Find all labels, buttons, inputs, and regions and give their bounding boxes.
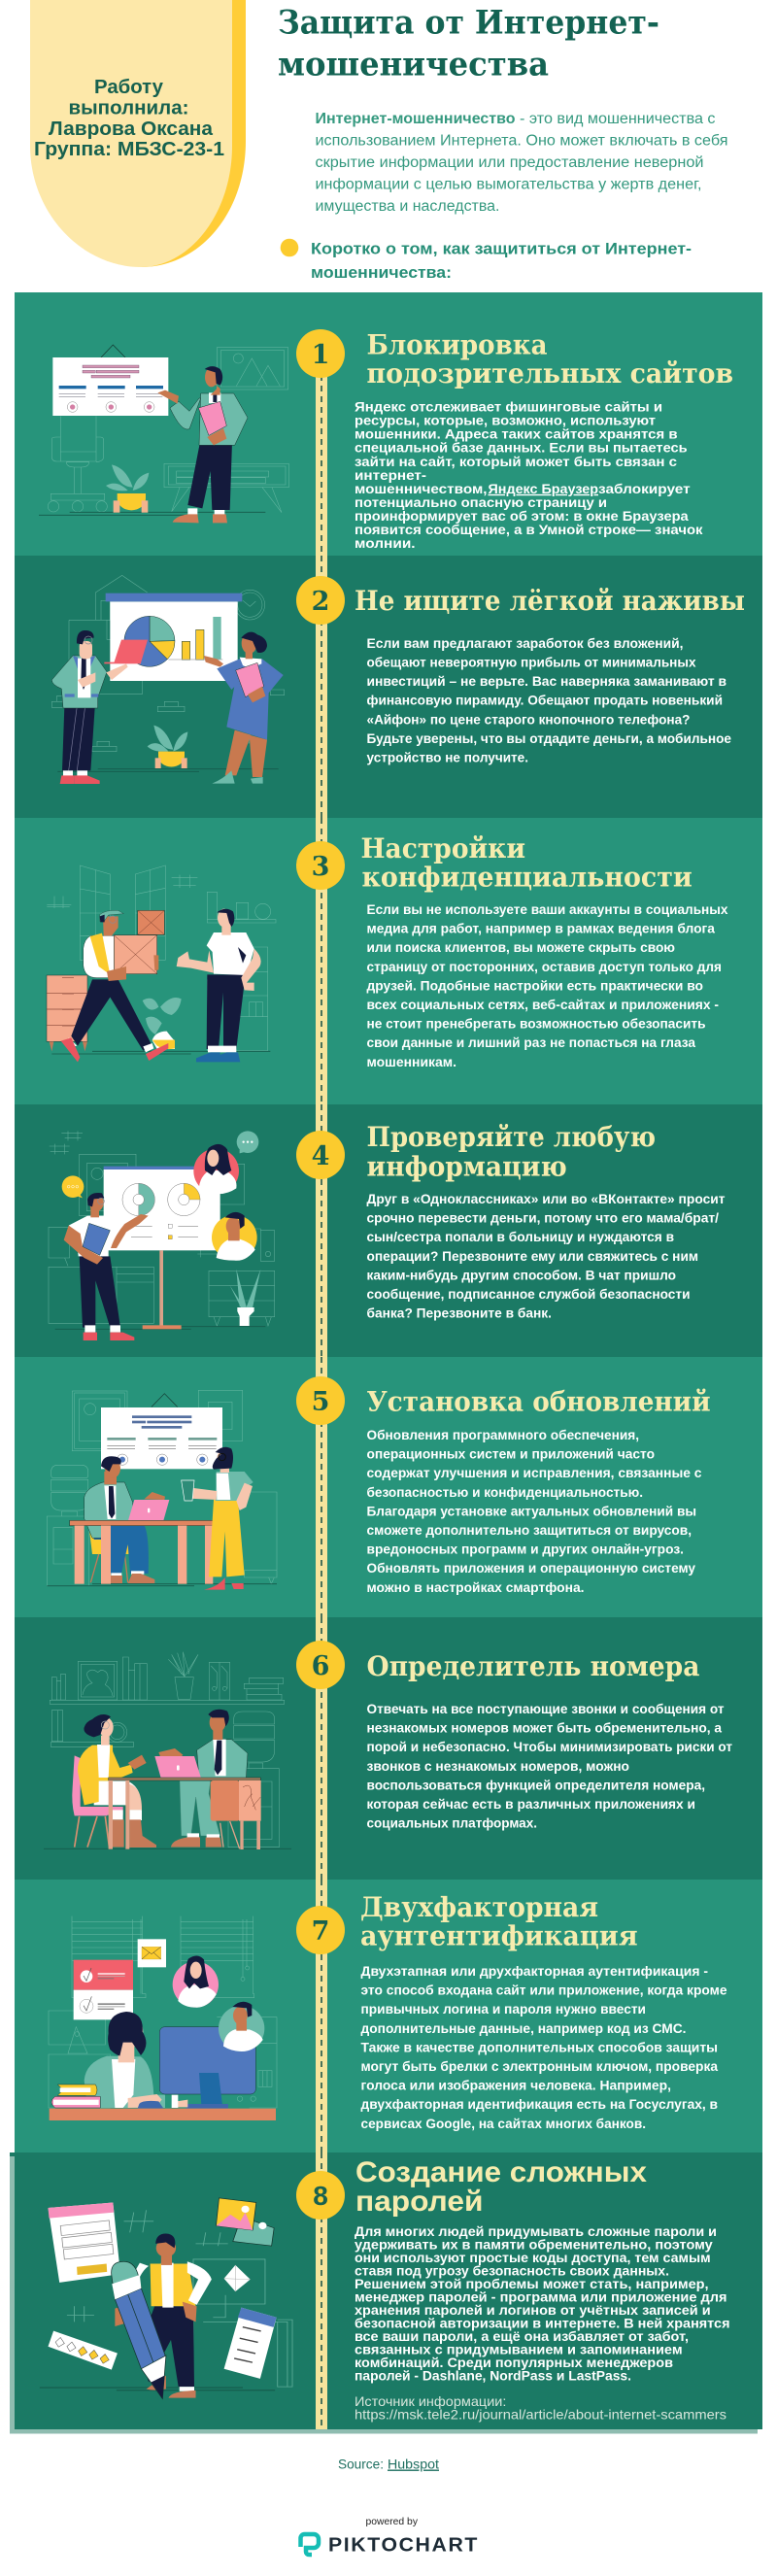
body text 5: Благодаря установке актуальных обновлений вы bbox=[367, 1504, 696, 1519]
body text 3: Если вы не используете ваши аккаунты в социальных bbox=[367, 902, 728, 918]
panel 5: install updates bbox=[15, 1357, 762, 1617]
illustration: man with giant pencil and cards bbox=[40, 2198, 292, 2399]
heading 8: Создание сложных bbox=[355, 2156, 647, 2188]
number badge 8: 8 bbox=[313, 2181, 328, 2211]
body text 3: страницу от посторонних, оставив доступ только для bbox=[367, 960, 722, 975]
body text 7: голоса или изображения человека. Например, bbox=[361, 2079, 671, 2094]
powered by Piktochart logo bbox=[301, 2516, 479, 2557]
intro text: - это вид мошенничества с bbox=[520, 111, 716, 127]
heading 1: подозрительных сайтов bbox=[367, 357, 733, 390]
body text 1: появится сообщение, а в Умной строке— значок bbox=[355, 523, 703, 538]
body text 8: все ваши пароли, а ещё она избавляет от забот, bbox=[355, 2329, 689, 2345]
body text 7: Также в качестве дополнительных способов защиты bbox=[361, 2040, 718, 2055]
body text 5: содержат улучшения и исправления, связанные с bbox=[367, 1466, 702, 1481]
body text 6: воспользоваться функцией определителя номера, bbox=[367, 1778, 705, 1793]
body text 4: Друг в «Одноклассниках» или во «ВКонтакте» просит bbox=[367, 1192, 726, 1207]
body text 1: интернет- bbox=[355, 468, 426, 484]
body text 4: каким-нибудь другим способом. В чат пришло bbox=[367, 1268, 676, 1283]
heading 8: паролей bbox=[355, 2186, 484, 2218]
body text 4 bbox=[367, 1192, 726, 1322]
body text 5: вредоносных программ и других онлайн-угроз. bbox=[367, 1542, 684, 1558]
body text 4: сын/сестра попали в больницу и нуждаются в bbox=[367, 1230, 674, 1245]
body text 1: ресурсы, которые, возможно, используют bbox=[355, 414, 656, 429]
heading 7: аунтентификация bbox=[360, 1920, 638, 1952]
body text 8: ставя под угрозу безопасность своих данных. bbox=[355, 2263, 669, 2279]
body text 5 bbox=[367, 1428, 702, 1596]
body text 7: это способ входана сайт или приложение, когда кроме bbox=[361, 1983, 727, 1999]
heading 6: Определитель номера bbox=[367, 1650, 699, 1682]
number badge 6 bbox=[296, 1641, 345, 1689]
body text 4: операции? Перезвоните ему или свяжитесь с ним bbox=[367, 1249, 698, 1265]
number badge 6: 6 bbox=[312, 1651, 329, 1681]
body text 7: могут быть брелки с электронным ключом, проверка bbox=[361, 2059, 718, 2075]
author badge bbox=[30, 0, 246, 267]
body text 5: операционных систем и приложений часто bbox=[367, 1447, 655, 1463]
body text 3 bbox=[367, 902, 728, 1070]
body text 6: социальных платформах. bbox=[367, 1816, 537, 1832]
number badge 1 bbox=[296, 329, 345, 378]
number badge 1: 1 bbox=[312, 340, 329, 370]
body text 7: дополнительные данные, например код из СМС. bbox=[361, 2021, 686, 2037]
body text 4: срочно перевести деньги, потому что его мама/брат/ bbox=[367, 1211, 719, 1227]
panel 2: no easy money bbox=[15, 556, 762, 818]
source of information: https://msk.tele2.ru/journal/article/about-internet-scammers bbox=[355, 2406, 726, 2422]
body text 2: инвестиций – не верьте. Вас наверняка заманивают в bbox=[367, 674, 726, 690]
body text 8: паролей - Dashlane, NordPass и LastPass. bbox=[355, 2368, 631, 2384]
number badge 7: 7 bbox=[312, 1916, 329, 1947]
number badge 8 bbox=[296, 2171, 345, 2220]
body text 6 bbox=[367, 1702, 732, 1832]
author badge: выполнила: bbox=[68, 97, 188, 119]
number badge 3 bbox=[296, 841, 345, 890]
body text 6: порой и небезопасно. Чтобы минимизировать риски от bbox=[367, 1740, 732, 1755]
heading 7 bbox=[360, 1891, 638, 1952]
source credit: Hubspot bbox=[388, 2456, 439, 2471]
intro text bbox=[315, 111, 728, 215]
body text 3: мошенникам. bbox=[367, 1055, 456, 1070]
heading 4 bbox=[367, 1121, 656, 1182]
source of information: Источник информации: bbox=[355, 2393, 506, 2409]
body text 1: специальной базе данных. Если вы пытаетесь bbox=[355, 441, 688, 457]
body text 1: мошенники. Адреса таких сайтов хранятся в bbox=[355, 427, 678, 443]
bullet subheading: Коротко о том, как защититься от Интернет- bbox=[311, 239, 692, 258]
illustration: presenter with board and avatars bbox=[49, 1131, 275, 1340]
powered by Piktochart logo: PIKTOCHART bbox=[328, 2535, 479, 2557]
powered by Piktochart logo: powered by bbox=[365, 2516, 419, 2527]
illustration: man carrying boxes and woman bbox=[47, 865, 276, 1062]
body text 3: свои данные и лишний раз не попасться на глаза bbox=[367, 1035, 695, 1051]
body text 8: Для многих людей придумывать сложные пароли и bbox=[355, 2224, 717, 2240]
body text 7: привычных логина и пароля нужно ввести bbox=[361, 2002, 646, 2017]
body text 7 bbox=[361, 1964, 727, 2132]
body text 1: зайти на сайт, который может быть связан с bbox=[355, 455, 677, 470]
body text 5: Обновлять приложения и операционную систему bbox=[367, 1561, 695, 1576]
illustration: woman at computer with notifications bbox=[49, 1916, 277, 2120]
illustration: office desk with two people bbox=[47, 1390, 277, 1590]
body text 1: мошенничеством, bbox=[355, 482, 488, 497]
body text 7: Двухэтапная или друхфакторная аутентификация - bbox=[361, 1964, 708, 1980]
illustration: two people with chart screen bbox=[51, 575, 285, 784]
number badge 2 bbox=[296, 576, 345, 625]
body text 8: они используют простые коды доступа, тем самым bbox=[355, 2251, 711, 2266]
author badge: Лаврова Оксана bbox=[49, 119, 214, 140]
panel 4: verify information bbox=[15, 1104, 762, 1357]
intro text: Интернет-мошенничество bbox=[315, 111, 515, 127]
body text 1 bbox=[355, 400, 703, 552]
body text 8: удерживать их в памяти обременительно, поэтому bbox=[355, 2238, 713, 2254]
body text 6: которая сейчас есть в различных приложениях и bbox=[367, 1797, 695, 1813]
body text 2: финансовую пирамиду. Обещают продать новенький bbox=[367, 694, 723, 709]
intro text: имущества и наследства. bbox=[315, 198, 499, 215]
body text 3: всех социальных сетях, веб-сайтах и приложениях - bbox=[367, 998, 719, 1013]
body text 2: обещают невероятную прибыль от минимальных bbox=[367, 656, 696, 671]
body text 2: Будьте уверены, что вы отдадите деньги, а мобильное bbox=[367, 731, 731, 747]
body text 2 bbox=[367, 636, 731, 765]
heading 1 bbox=[367, 328, 733, 390]
number badge 4 bbox=[296, 1131, 345, 1179]
heading 1: Блокировка bbox=[367, 328, 548, 361]
intro text: информации с целью вымогательства у жертв денег, bbox=[315, 177, 701, 192]
intro text: скрытие информации или предоставление неверной bbox=[315, 154, 703, 171]
body text 5: сможете дополнительно защититься от вирусов, bbox=[367, 1523, 692, 1539]
body text 8: комбинаций. Среди популярных менеджеров bbox=[355, 2356, 673, 2371]
heading 3: Настройки bbox=[361, 832, 525, 864]
body text 7: сервисах Google, на сайтах многих банков. bbox=[361, 2117, 646, 2132]
body text 3: или поиска клиентов, вы можете скрыть свою bbox=[367, 940, 675, 956]
body text 3: медиа для работ, например в рамках ведения блога bbox=[367, 922, 715, 937]
heading 8 bbox=[355, 2156, 647, 2218]
body text 6: звонков с незнакомых номеров, можно bbox=[367, 1759, 629, 1775]
body text 8 bbox=[355, 2224, 730, 2384]
body text 1: заблокирует bbox=[598, 482, 691, 497]
panel 6: caller ID bbox=[15, 1617, 762, 1880]
body text 1: Яндекс Браузер bbox=[488, 482, 598, 497]
body text 8: Решением этой проблемы может стать, например, bbox=[355, 2277, 709, 2292]
body text 3: друзей. Подобные настройки есть практически во bbox=[367, 978, 703, 994]
source credit: Source: bbox=[338, 2456, 384, 2471]
number badge 5: 5 bbox=[312, 1387, 329, 1417]
body text 5: безопасностью и конфиденциальностью. bbox=[367, 1485, 643, 1501]
body text 8: связанных с придумыванием и запоминанием bbox=[355, 2343, 683, 2358]
author badge: Группа: МБЗС-23-1 bbox=[34, 139, 224, 160]
number badge 7 bbox=[296, 1906, 345, 1954]
source credit bbox=[338, 2456, 439, 2471]
body text 2: Если вам предлагают заработок без вложений, bbox=[367, 636, 684, 652]
number badge 4: 4 bbox=[312, 1141, 329, 1171]
bullet subheading bbox=[281, 239, 692, 282]
panel 8: strong passwords bbox=[10, 2152, 762, 2434]
body text 4: банка? Перезвоните в банк. bbox=[367, 1306, 552, 1322]
panel 1: blocking suspicious sites bbox=[15, 292, 762, 556]
icon: Piktochart P mark bbox=[301, 2534, 319, 2555]
heading 3 bbox=[361, 832, 693, 894]
panel 3: privacy settings bbox=[15, 818, 762, 1104]
body text 6: незнакомых номеров может быть обременительно, а bbox=[367, 1721, 722, 1737]
number badge 2: 2 bbox=[312, 587, 329, 617]
source of information bbox=[355, 2393, 726, 2422]
title: мошеничества bbox=[278, 45, 549, 84]
heading 2: Не ищите лёгкой наживы bbox=[355, 585, 745, 617]
body text 5: можно в настройках смартфона. bbox=[367, 1580, 585, 1596]
body text 8: безопасной авторизации в интернете. В ней хранятся bbox=[355, 2316, 730, 2331]
body text 4: сообщение, подписанное службой безопасности bbox=[367, 1287, 690, 1303]
author badge: Работу bbox=[94, 77, 164, 98]
number badge 5 bbox=[296, 1376, 345, 1425]
body text 1: потенциально опасную страницу и bbox=[355, 495, 607, 511]
heading 7: Двухфакторная bbox=[360, 1891, 598, 1923]
body text 3: не стоит пренебрегать возможностью обезопасить bbox=[367, 1017, 706, 1033]
bullet subheading: мошенничества: bbox=[311, 263, 452, 282]
body text 1: молнии. bbox=[355, 536, 416, 552]
heading 4: информацию bbox=[367, 1150, 567, 1182]
number badge 3: 3 bbox=[312, 852, 329, 882]
heading 3: конфиденциальности bbox=[361, 861, 693, 894]
body text 8: хранения паролей и логинов от учётных записей и bbox=[355, 2303, 711, 2319]
body text 1: проинформирует вас об этом: в окне Браузера bbox=[355, 509, 689, 525]
illustration: presenter with poster bbox=[39, 345, 288, 523]
heading 4: Проверяйте любую bbox=[367, 1121, 656, 1153]
body text 5: Обновления программного обеспечения, bbox=[367, 1428, 639, 1443]
body text 2: устройство не получите. bbox=[367, 750, 528, 765]
body text 6: Отвечать на все поступающие звонки и сообщения от bbox=[367, 1702, 725, 1717]
body text 2: «Айфон» по цене старого кнопочного телефона? bbox=[367, 712, 690, 728]
body text 1: Яндекс отслеживает фишинговые сайты и bbox=[355, 400, 662, 416]
intro text: использованием Интернета. Оно может включать в себя bbox=[315, 132, 728, 150]
illustration: two people at table bbox=[44, 1652, 291, 1849]
title: Защита от Интернет- bbox=[278, 4, 659, 43]
title bbox=[278, 4, 659, 84]
body text 8: менеджер паролей - программа или приложение для bbox=[355, 2290, 726, 2306]
body text 7: двухфакторная идентификация есть на Госуслугах, в bbox=[361, 2097, 718, 2113]
heading 5: Установка обновлений bbox=[367, 1385, 711, 1418]
panel 7: two-factor authentication bbox=[15, 1880, 762, 2152]
